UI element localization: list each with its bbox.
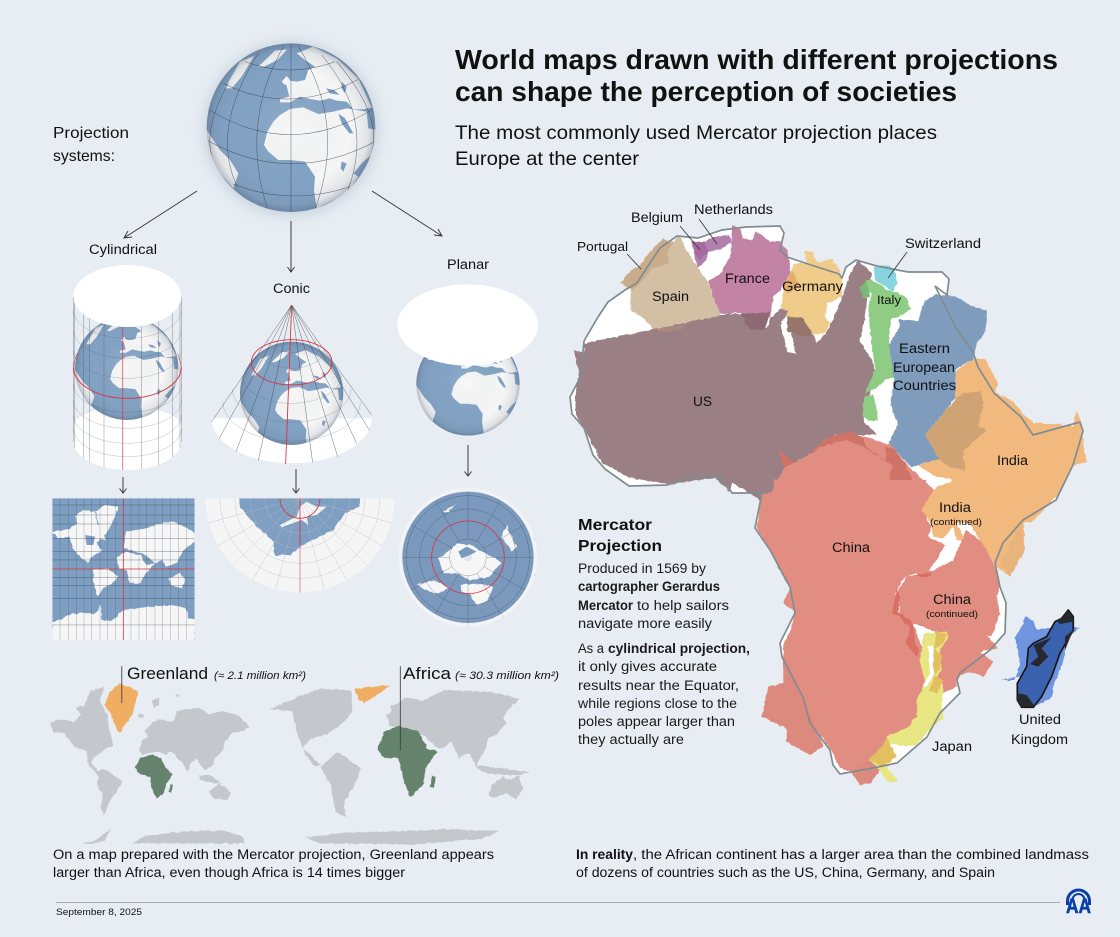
us overlap tones [653, 312, 813, 336]
mercator projection heading [578, 517, 662, 555]
country labels: (continued) [930, 517, 982, 528]
subtitle: The most commonly used Mercator projection places [455, 122, 937, 144]
country labels [577, 202, 1068, 754]
eastern europe [889, 295, 987, 467]
country labels: Spain [652, 289, 689, 304]
china north [763, 435, 934, 522]
country labels: Italy [877, 295, 901, 307]
date: September 8, 2025 [56, 907, 142, 918]
africa outline [570, 226, 1083, 774]
arrow: to conic [288, 221, 294, 272]
planar flat map [399, 488, 537, 627]
label: projection systems [53, 125, 129, 165]
mercator projection text: cylindrical projection, [608, 641, 750, 656]
logo: anadolu agency: AA [1066, 895, 1091, 918]
arrow: to planar [372, 191, 442, 236]
caption: in reality: In reality [576, 847, 633, 862]
label: greenland: Greenland [127, 664, 208, 683]
belgium and netherlands [692, 235, 731, 267]
japan overlap [868, 632, 947, 767]
country labels: France [725, 271, 770, 286]
switzerland [873, 265, 898, 292]
india continued [922, 480, 1060, 577]
country labels: European [893, 360, 955, 375]
italy [860, 280, 911, 421]
mercator projection heading: Projection [578, 538, 662, 555]
label: projection systems: systems: [53, 148, 115, 165]
mercator projection text: poles appear larger than [578, 714, 735, 729]
china west [757, 480, 945, 773]
mercator projection text: they actually are [578, 732, 684, 747]
japan white gap [887, 645, 935, 765]
mercator projection text: Mercator [578, 598, 634, 613]
india main [918, 359, 1087, 522]
logo: anadolu agency [1066, 890, 1091, 918]
arrow: to cylindrical [124, 191, 197, 238]
country labels: (continued) [926, 609, 978, 620]
africa outline stroke [570, 226, 1083, 774]
mercator projection text [577, 561, 750, 747]
country labels: India [939, 500, 972, 515]
label: africa: (≈ 30.3 million km²) [455, 670, 559, 682]
main globe [203, 43, 378, 215]
label: greenland [127, 664, 306, 683]
title [455, 44, 1058, 107]
caption: in reality: , the African continent has a larger area than the combined landmass [633, 847, 1089, 862]
country labels: Japan [932, 739, 972, 754]
mercator projection text: cartographer Gerardus [578, 579, 720, 594]
mercator projection text: Produced in 1569 by [578, 561, 706, 576]
mercator projection text: while regions close to the [577, 696, 737, 711]
title: can shape the perception of societies [455, 76, 957, 107]
china overlaps [779, 431, 913, 493]
china outer south [762, 660, 880, 785]
arrow: planar down [464, 445, 472, 476]
label: projection systems: Projection [53, 125, 129, 142]
caption: greenland vs africa: larger than Africa, even though Africa is 14 times bigger [53, 865, 406, 880]
country labels: Switzerland [905, 236, 981, 251]
united kingdom light shape [1000, 617, 1080, 707]
mercator projection text: navigate more easily [578, 616, 712, 631]
madagascar outline [1017, 610, 1073, 707]
label: conic: Conic [273, 281, 310, 296]
country labels: Netherlands [694, 202, 773, 217]
country labels: Eastern [899, 341, 950, 356]
country labels: US [693, 394, 712, 409]
cylindrical projection diagram [73, 265, 181, 470]
label: africa: Africa [403, 664, 452, 683]
mercator flat map [52, 498, 195, 643]
country shapes lower [757, 480, 1080, 785]
mercator projection text: results near the Equator, [578, 678, 739, 693]
caption: in reality [576, 847, 1089, 880]
us [574, 261, 877, 503]
germany [780, 250, 842, 335]
china east [898, 530, 1000, 693]
country labels: Germany [782, 279, 843, 294]
india overlap [925, 391, 987, 471]
arrow: cylindrical down [120, 477, 126, 493]
subtitle: Europe at the center [455, 148, 640, 170]
country labels: India [997, 453, 1029, 468]
spain and portugal [620, 235, 720, 329]
mercator projection text: it only gives accurate [578, 659, 717, 674]
country labels: China [832, 540, 871, 555]
conic flat map [206, 495, 394, 593]
world map: greenland highlighted [50, 666, 250, 844]
country labels: China [933, 592, 972, 607]
china strips [892, 573, 933, 657]
caption: in reality: of dozens of countries such as the US, China, Germany, and Spain [576, 865, 995, 880]
subtitle [455, 122, 937, 170]
label: africa [403, 664, 559, 683]
mercator projection heading: Mercator [578, 517, 652, 534]
country labels: Kingdom [1011, 732, 1068, 747]
country shapes upper [574, 224, 1087, 522]
country labels: Portugal [577, 240, 628, 254]
label: greenland: (≈ 2.1 million km²) [214, 670, 306, 682]
africa comparison map [570, 224, 1087, 785]
caption: greenland vs africa: On a map prepared with the Mercator projection, Greenland appears [53, 847, 494, 862]
country labels: Countries [893, 378, 956, 393]
conic projection diagram [212, 305, 372, 464]
world map: africa highlighted [270, 666, 530, 844]
mercator projection text: As a [578, 641, 604, 656]
japan [868, 632, 948, 782]
france [708, 224, 791, 328]
country labels: United [1019, 712, 1061, 727]
caption: greenland vs africa [53, 847, 494, 880]
title: World maps drawn with different projections [455, 44, 1058, 75]
planar projection diagram [397, 284, 538, 436]
arrow: conic down [292, 469, 300, 493]
label: planar: Planar [447, 257, 490, 272]
leader lines [627, 219, 907, 278]
mercator projection text: to help sailors [637, 598, 729, 613]
country labels: Belgium [631, 210, 683, 225]
label: cylindrical: Cylindrical [89, 242, 157, 257]
